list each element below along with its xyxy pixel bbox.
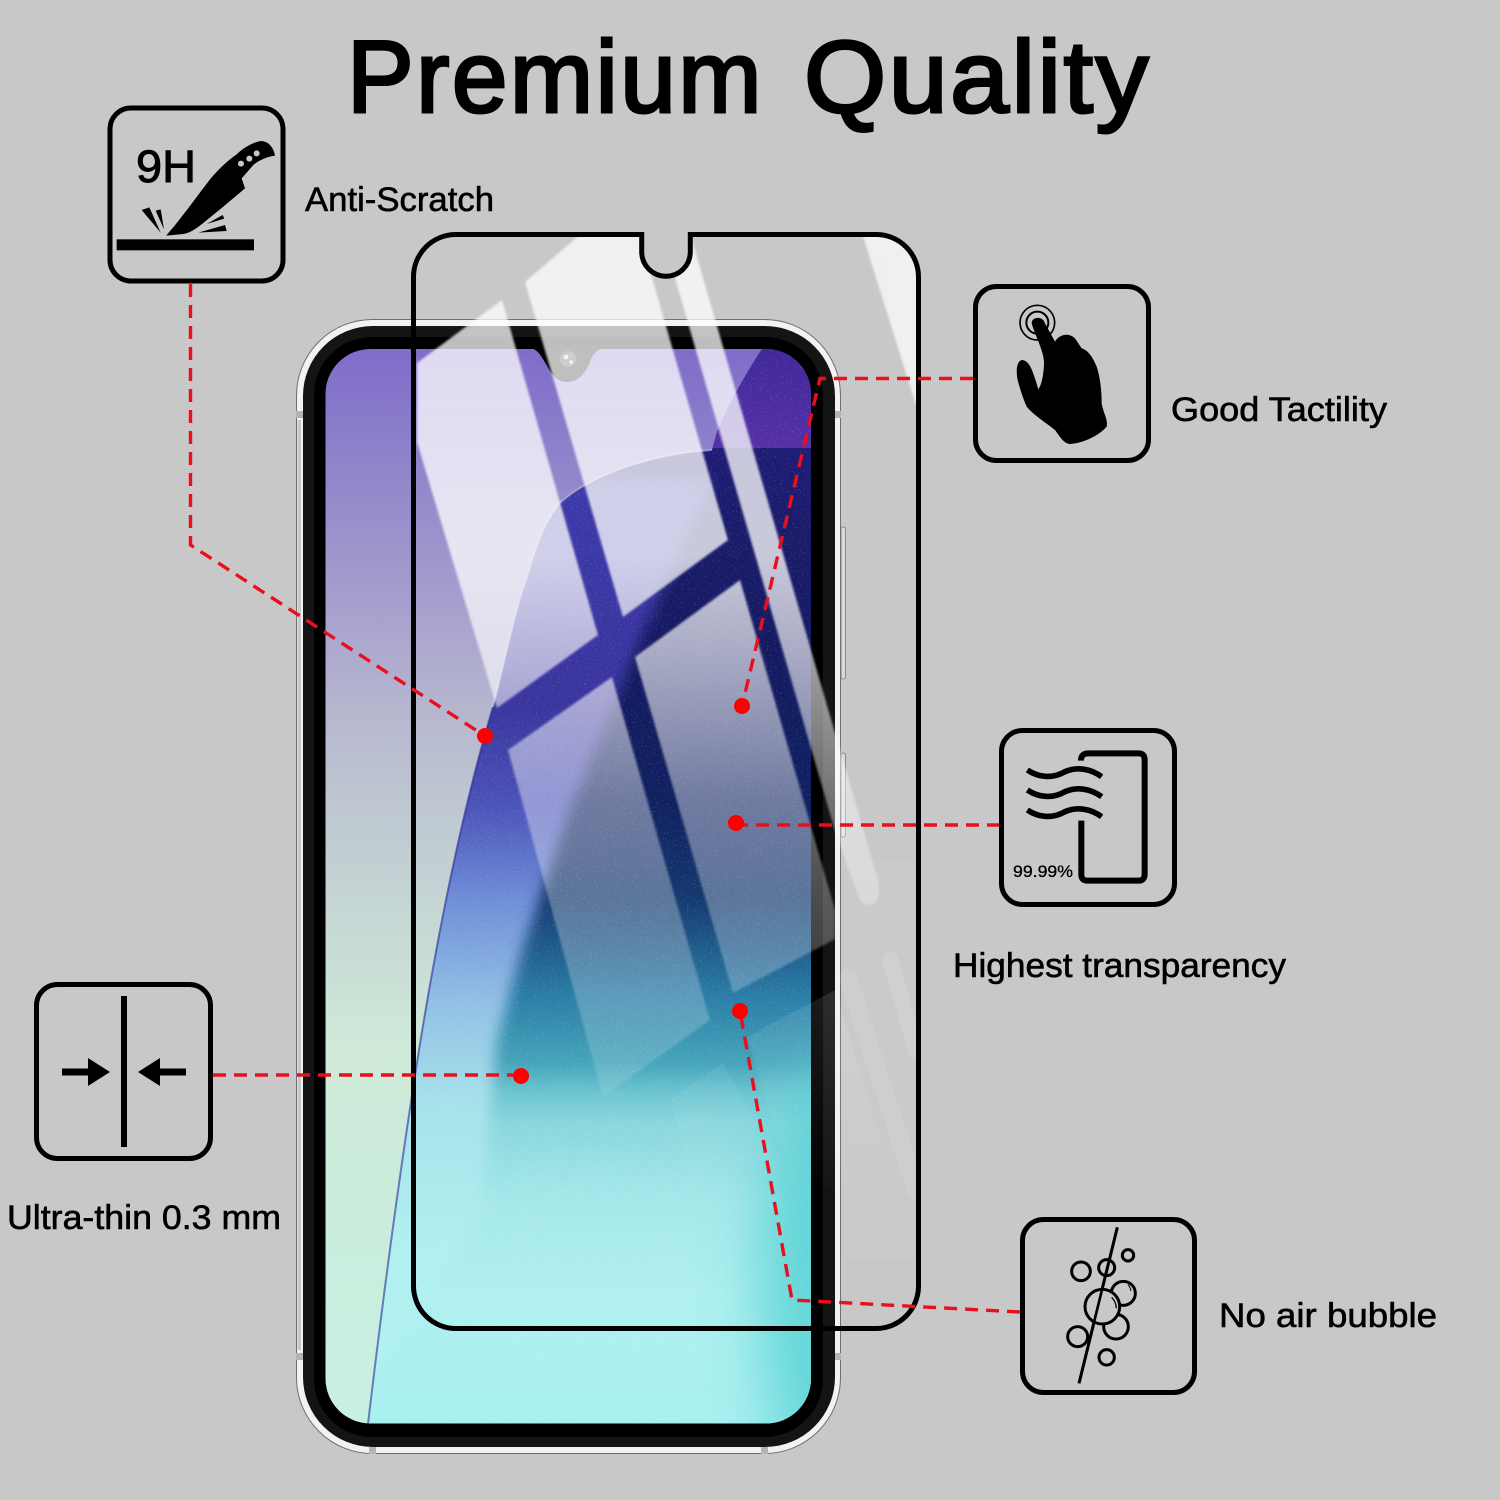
speckle texture: [360, 349, 811, 1424]
feature: no air bubble: [1022, 1220, 1437, 1392]
phone bezel: [303, 326, 835, 1447]
wave edge highlight: [368, 707, 493, 1424]
title: [347, 20, 1151, 134]
teardrop notch: [528, 347, 606, 382]
label: Good Tactility: [1171, 391, 1387, 429]
phone screen wallpaper: [326, 349, 811, 1424]
dark wave shape: [368, 349, 811, 1424]
feature: ultra-thin: [7, 984, 281, 1237]
phone inner bezel: [314, 337, 823, 1437]
label: No air bubble: [1219, 1297, 1437, 1335]
feature: highest transparency: [953, 730, 1286, 985]
wave upper edge highlight: [493, 450, 712, 707]
feature: anti-scratch: [110, 108, 494, 281]
glass protector: [414, 233, 925, 1328]
callout dots: [477, 698, 750, 1084]
phone antenna bands: [296, 411, 841, 1454]
front camera: [560, 351, 576, 367]
icon box: [110, 108, 283, 281]
right teal shading: [724, 1052, 811, 1424]
icon box: [36, 984, 210, 1158]
icon box: [1002, 730, 1174, 904]
pale wallpaper: [325, 349, 811, 1424]
callout lines: [190, 284, 1020, 1312]
glass reflections: [416, 237, 916, 1134]
icon: 9H: 9H: [136, 141, 196, 192]
icon: phone and waves: [1027, 753, 1145, 881]
glass outline: [414, 234, 918, 1328]
icon: percentage: 99.99%: [1013, 863, 1073, 881]
label: Ultra-thin 0.3 mm: [7, 1199, 281, 1237]
feature: good tactility: [976, 286, 1387, 460]
label: Anti-Scratch: [305, 181, 494, 219]
icon box: [976, 286, 1148, 460]
label: Highest transparency: [953, 947, 1286, 985]
blue left area: [398, 478, 715, 1196]
icon: touching hand: [1017, 305, 1107, 444]
phone: [296, 319, 846, 1454]
title: Premium: [347, 20, 764, 134]
phone frame: [296, 320, 840, 1454]
icon box: [1022, 1220, 1194, 1392]
phone side buttons: [841, 527, 846, 837]
icon: thin line with arrows: [62, 996, 186, 1147]
title: Quality: [804, 20, 1151, 134]
icon: knife and surface: [117, 141, 275, 250]
purple top area: [712, 349, 811, 448]
icon: bubbles: [1068, 1227, 1135, 1383]
phone left side shading: [298, 420, 301, 1350]
